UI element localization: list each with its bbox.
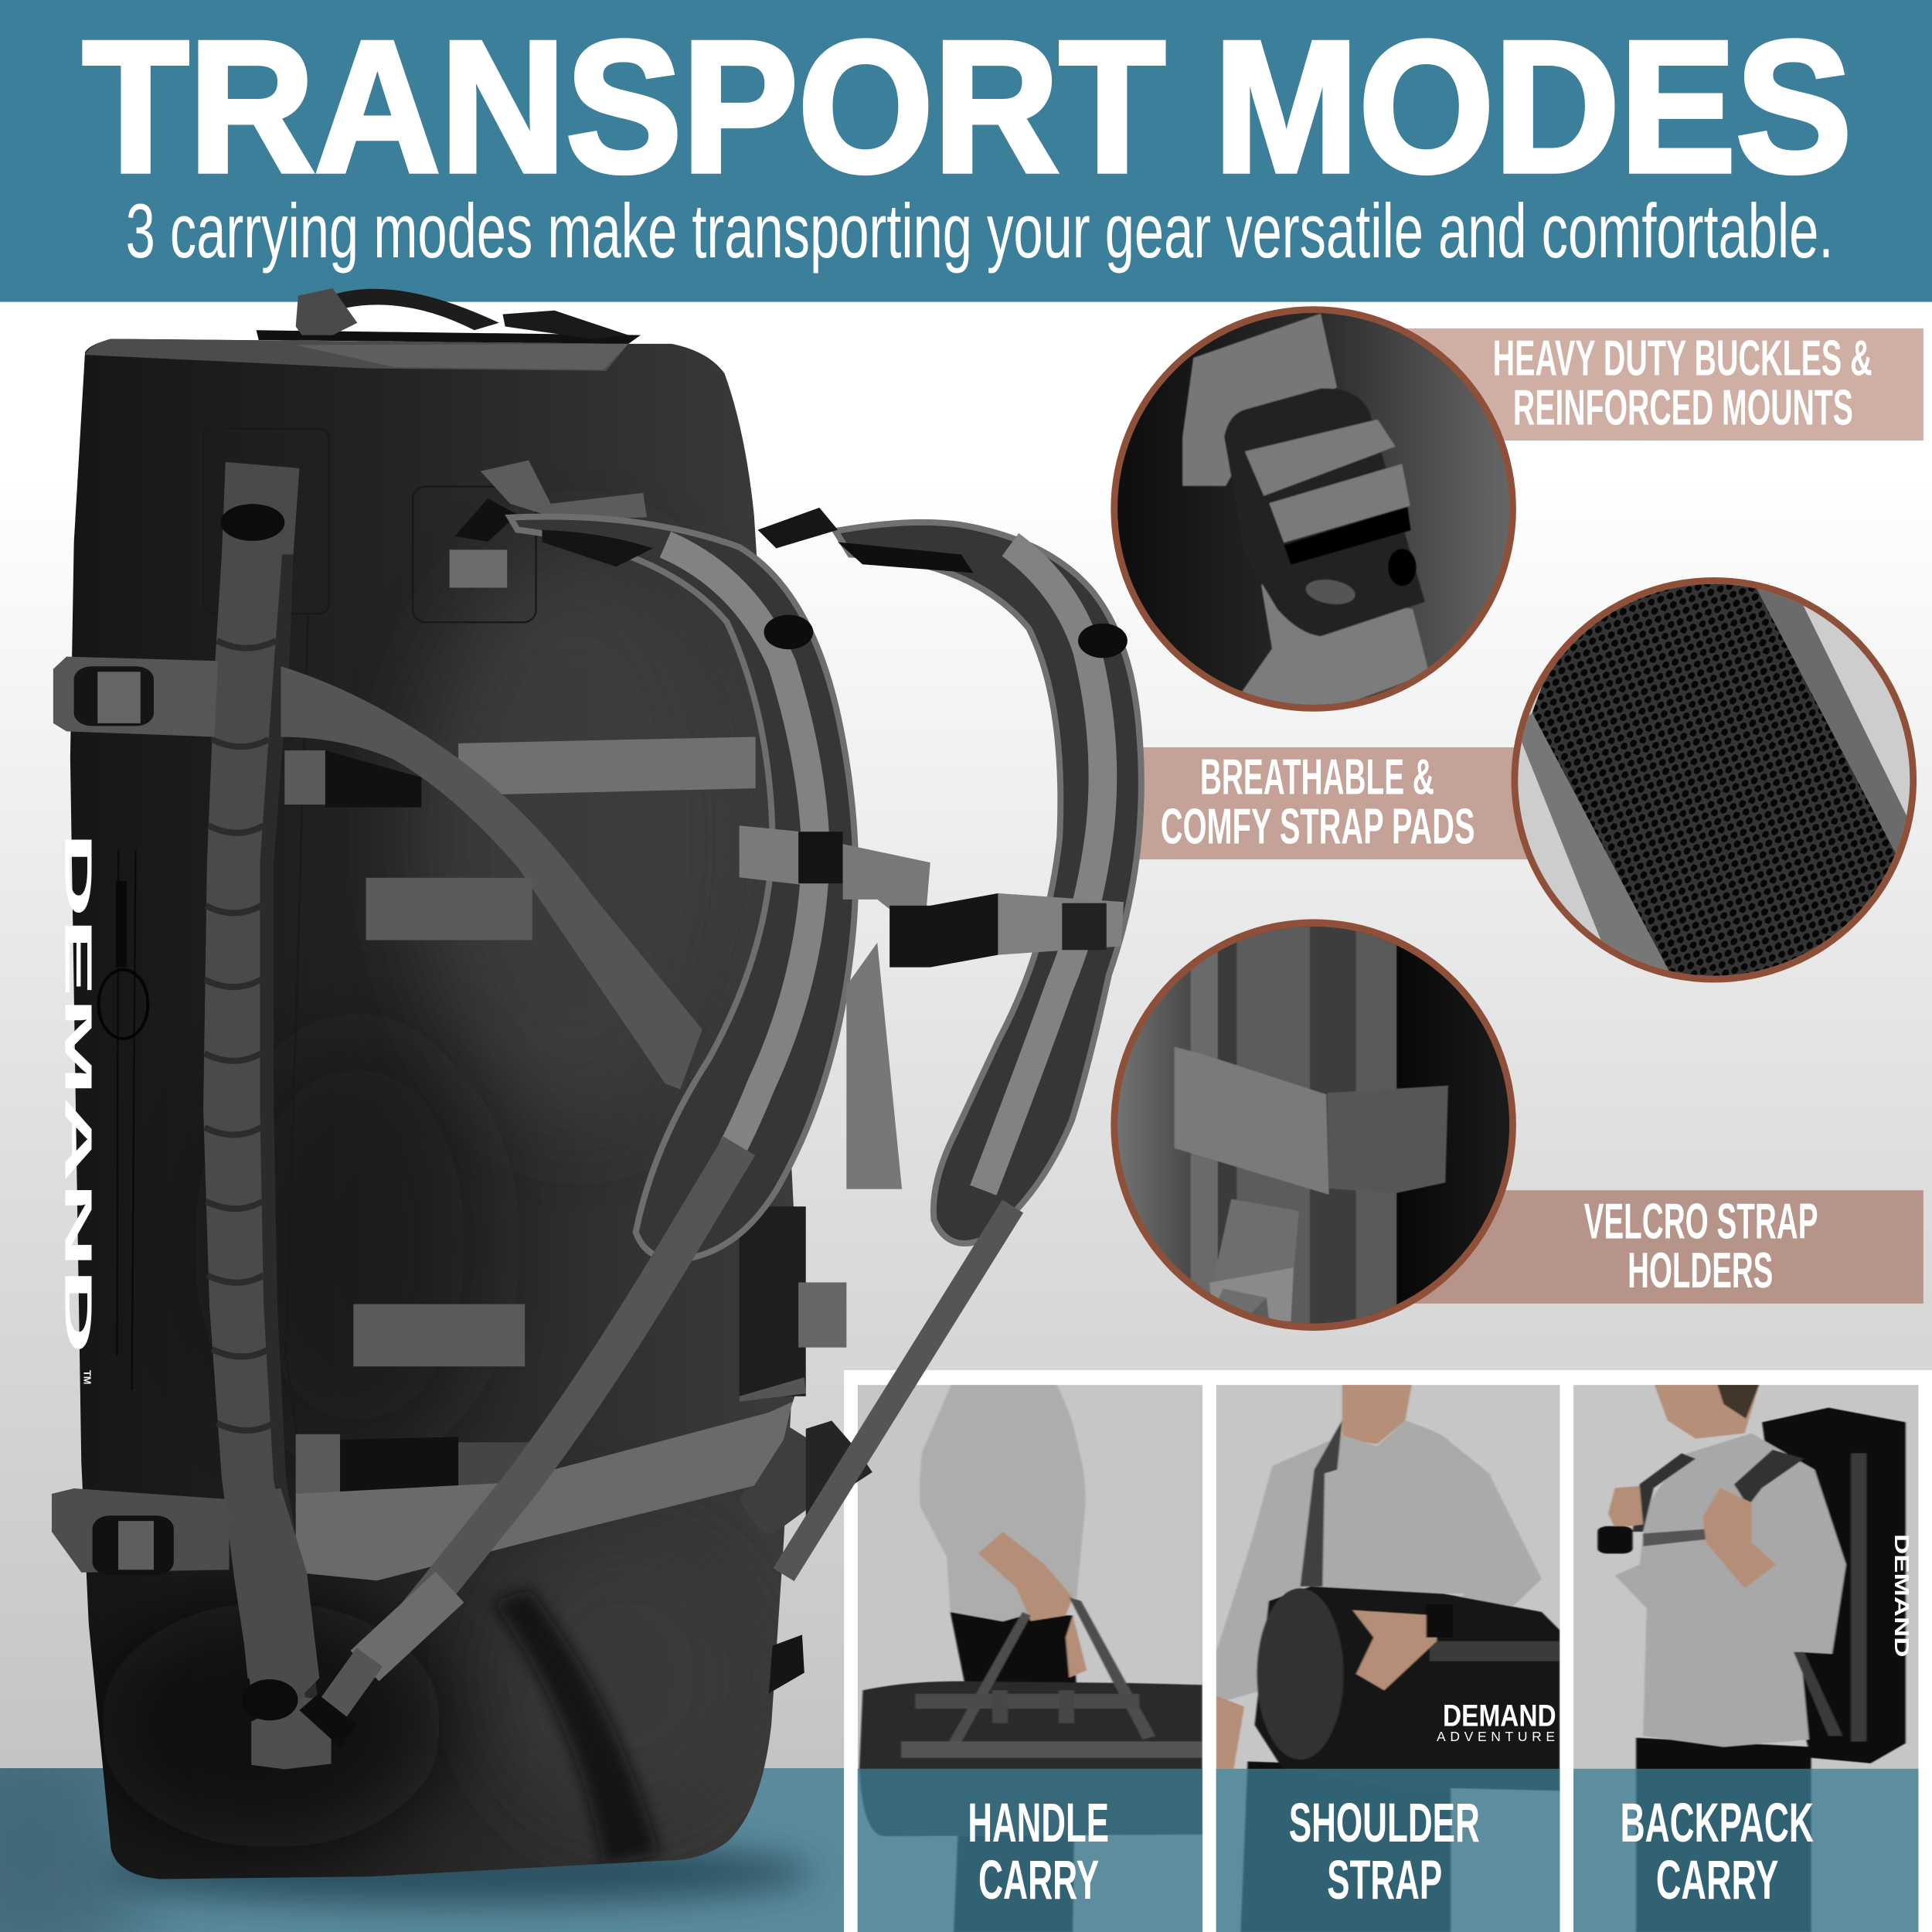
- photo panel: handle carry: CARRY: [978, 1849, 1099, 1911]
- vertical brand text: [57, 832, 100, 1384]
- bag body: [70, 338, 802, 1879]
- photo panel: shoulder strap: STRAP: [1327, 1849, 1442, 1911]
- horizontal strap: [458, 736, 756, 795]
- label: breathable strap pads: COMFY STRAP PADS: [1161, 798, 1475, 854]
- header banner: [0, 0, 1932, 302]
- rear shoulder strap: [758, 508, 1141, 1243]
- bottom teal band: [0, 1768, 844, 1932]
- label: breathable strap pads: [1131, 747, 1550, 859]
- label: breathable strap pads: BREATHABLE &: [1200, 750, 1434, 805]
- photo panel: backpack carry: BACKPACK: [1621, 1792, 1814, 1854]
- vertical brand text: DEMAND: [57, 832, 100, 1354]
- lower waist strap: [296, 1402, 793, 1580]
- photo panel: handle carry: [858, 1383, 1202, 1932]
- bag top roll: [85, 338, 628, 371]
- upper left strap and buckle: [53, 657, 218, 736]
- side pocket flap: [740, 1420, 872, 1534]
- right side frame: [740, 1206, 846, 1402]
- bag logo: [1437, 1699, 1556, 1744]
- photo panel: shoulder strap: [1216, 1383, 1560, 1932]
- photo frame: [844, 1370, 1932, 1932]
- photo panel: backpack carry: [1573, 1383, 1918, 1932]
- lower left strap and buckle: [52, 1488, 230, 1575]
- circle detail: mesh pad: [1511, 577, 1917, 994]
- upper seam patches: [203, 429, 536, 1515]
- top strap loop: [450, 461, 647, 588]
- front shoulder strap: [510, 516, 855, 1260]
- top carry handle: [257, 288, 641, 344]
- duffel bag standing upright: [52, 288, 1141, 1879]
- zipper and cord: [99, 850, 148, 1389]
- bag logo: ADVENTURE: [1437, 1729, 1555, 1744]
- vertical brand text: TM: [81, 1370, 93, 1384]
- bag logo: DEMAND: [1890, 1534, 1912, 1657]
- photo panel: shoulder strap: SHOULDER: [1289, 1792, 1480, 1854]
- photo panel: handle carry: HANDLE: [968, 1792, 1109, 1854]
- label: velcro strap holders: [1355, 1190, 1923, 1304]
- daisy chain webbing: [203, 462, 318, 1700]
- velcro holder upper: [366, 878, 532, 940]
- circle detail: velcro holder: [1109, 912, 1522, 1360]
- chest strap and buckle: [740, 825, 1124, 1189]
- lower webbing and tail: [226, 1488, 332, 1769]
- lower strap with buckle: [296, 1434, 532, 1499]
- label: velcro strap holders: HOLDERS: [1628, 1243, 1773, 1298]
- body shading: [99, 554, 764, 1866]
- title: TRANSPORT MODES: [83, 3, 1852, 212]
- lower right D ring: [769, 1634, 804, 1693]
- circle detail: buckle: [1109, 302, 1522, 721]
- caption band: shoulder strap: [1216, 1769, 1560, 1932]
- caption band: backpack carry: [1573, 1769, 1918, 1932]
- long shoulder strap: [299, 1146, 1013, 1747]
- caption band: handle carry: [858, 1769, 1202, 1932]
- velcro holder lower: [353, 1304, 525, 1366]
- photo panel: backpack carry: CARRY: [1656, 1849, 1778, 1911]
- diagonal strap: [281, 666, 702, 1089]
- center buckle: [284, 750, 421, 808]
- bag logo: DEMAND: [1443, 1699, 1556, 1733]
- label: heavy duty buckles: [1355, 328, 1923, 440]
